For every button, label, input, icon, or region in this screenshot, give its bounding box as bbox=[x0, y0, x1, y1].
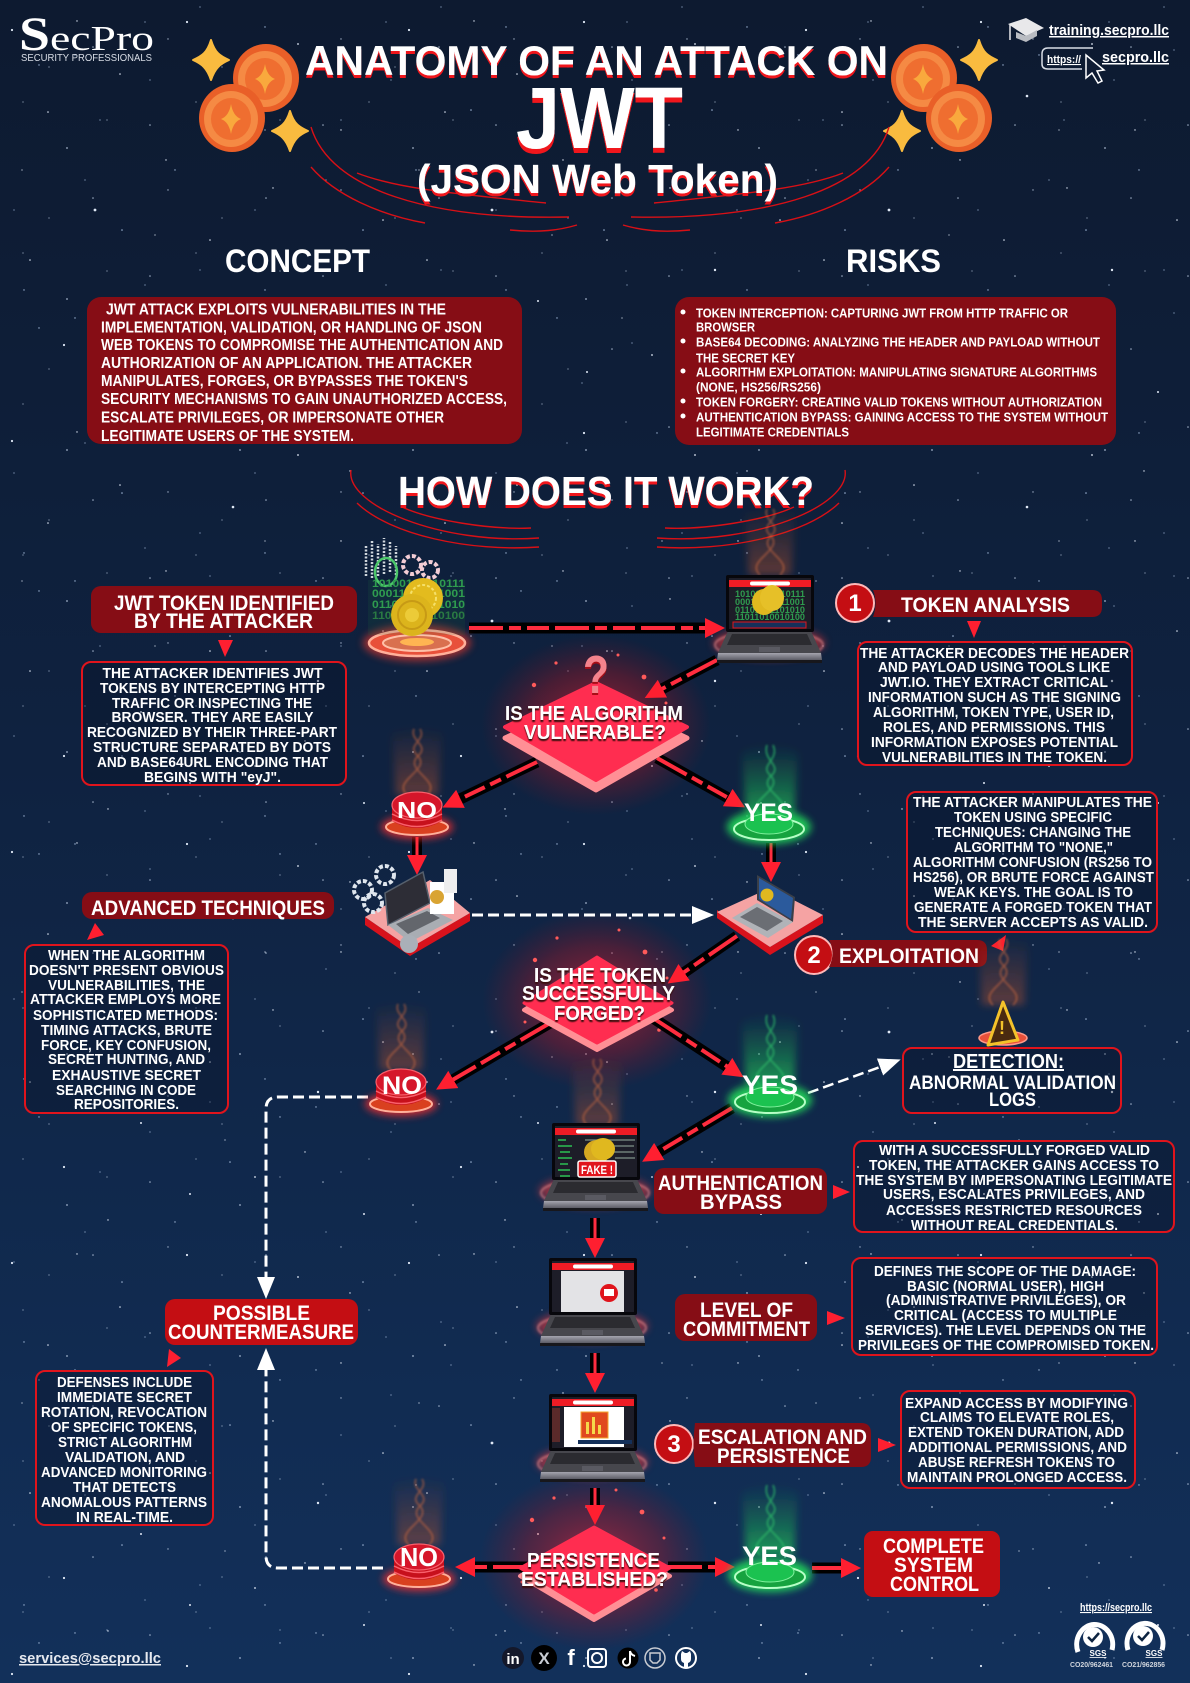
text box: countermeasure: IMMEDIATE SECRET bbox=[57, 1389, 192, 1406]
text box: escalation: CLAIMS TO ELEVATE ROLES, bbox=[920, 1409, 1114, 1426]
icon: token coins on platform: 11011010010100 bbox=[372, 610, 465, 622]
text box: escalation: MAINTAIN PROLONGED ACCESS. bbox=[907, 1469, 1127, 1486]
label: possible countermeasure bbox=[165, 1299, 358, 1345]
text box: escalation: EXPAND ACCESS BY MODIFYING bbox=[905, 1395, 1128, 1412]
text box: detection: ABNORMAL VALIDATION bbox=[909, 1073, 1116, 1094]
decision: is the token successfully forged: IS THE TOKEN bbox=[534, 965, 666, 987]
text box: level of commitment: (ADMINISTRATIVE PRIVILEGES), OR bbox=[886, 1292, 1126, 1309]
decorative coins right bbox=[884, 40, 997, 152]
footer: website and certifications bbox=[1070, 1602, 1165, 1669]
heading: concept: CONCEPT bbox=[225, 243, 370, 279]
text box: exploitation: WEAK KEYS. THE GOAL IS TO bbox=[934, 884, 1133, 901]
text box: detection: DETECTION: bbox=[953, 1051, 1064, 1073]
decision: is the algorithm vulnerable bbox=[505, 645, 687, 790]
text box: token analysis: JWT.IO. THEY EXTRACT CRITICAL bbox=[880, 674, 1108, 691]
panel: risks: TOKEN INTERCEPTION: CAPTURING JWT FROM HTTP TRAFFIC OR bbox=[696, 306, 1069, 320]
decision: is the token successfully forged bbox=[522, 957, 676, 1050]
icon: twitch bbox=[645, 1648, 665, 1668]
node: YES 2 bbox=[728, 1014, 812, 1117]
text box: advanced techniques: EXHAUSTIVE SECRET bbox=[52, 1067, 201, 1084]
icon: x bbox=[531, 1645, 557, 1671]
text box: advanced techniques: VULNERABILITIES, THE bbox=[48, 977, 205, 994]
text box: token identification: RECOGNIZED BY THEIR THREE-PART bbox=[87, 724, 337, 741]
arrows bbox=[266, 628, 880, 1568]
text box: token analysis: VULNERABILITIES IN THE TOKEN. bbox=[882, 749, 1107, 766]
title: ANATOMY OF AN ATTACK ON bbox=[305, 37, 888, 84]
heading: how does it work: HOW DOES IT WORK? bbox=[398, 468, 814, 514]
text box: token identification: THE ATTACKER IDENTIFIES JWT bbox=[102, 665, 322, 682]
icon: linkedin: in bbox=[506, 1651, 520, 1668]
badge: step 3 bbox=[655, 1425, 693, 1463]
node: YES 1: YES bbox=[744, 799, 793, 827]
text box: countermeasure: THAT DETECTS bbox=[73, 1479, 176, 1496]
badge: step 1 bbox=[836, 584, 874, 622]
text box: level of commitment: SERVICES). THE LEVEL DEPENDS ON THE bbox=[865, 1322, 1146, 1339]
heading: risks: RISKS bbox=[846, 243, 941, 279]
text box: token analysis: THE ATTACKER DECODES THE HEADER bbox=[860, 645, 1129, 662]
text box: countermeasure: OF SPECIFIC TOKENS, bbox=[51, 1419, 197, 1436]
text box: exploitation: ALGORITHM CONFUSION (RS256 TO bbox=[913, 854, 1152, 871]
link: secpro: secpro.llc bbox=[1102, 49, 1169, 66]
text box: escalation: ADDITIONAL PERMISSIONS, AND bbox=[908, 1439, 1127, 1456]
panel: concept: AUTHORIZATION OF AN APPLICATION. THE ATTACKER bbox=[101, 355, 472, 372]
icon: linkedin bbox=[502, 1647, 524, 1669]
icon: fake token laptop: FAKE ! bbox=[581, 1163, 613, 1177]
decision: persistence established: PERSISTENCE bbox=[527, 1550, 660, 1572]
icon: laptop token analysis: 10100110010111 bbox=[735, 589, 805, 599]
badge: step 2: 2 bbox=[807, 942, 821, 969]
icon: tiktok bbox=[618, 1648, 638, 1668]
text box: token identification: TOKENS BY INTERCEPTING HTTP bbox=[100, 680, 325, 697]
text box: countermeasure: IN REAL-TIME. bbox=[76, 1509, 173, 1526]
label: escalation and persistence bbox=[694, 1423, 871, 1468]
icon: instagram bbox=[588, 1649, 606, 1667]
icon: warning: ! bbox=[999, 1018, 1005, 1038]
panel: concept: ESCALATE PRIVILEGES, OR IMPERSONATE OTHER bbox=[101, 410, 444, 426]
pointer bbox=[167, 1349, 181, 1367]
icon: laptop level of commitment bbox=[536, 1258, 648, 1346]
panel: risks: TOKEN FORGERY: CREATING VALID TOKENS WITHOUT AUTHORIZATION bbox=[696, 394, 1102, 410]
panel: concept: MANIPULATES, FORGES, OR BYPASSES THE TOKEN'S bbox=[101, 373, 468, 390]
text box: authentication bypass bbox=[854, 1141, 1174, 1234]
link: training: training.secpro.llc bbox=[1049, 22, 1169, 39]
label: escalation and persistence: ESCALATION AND bbox=[698, 1426, 867, 1449]
icon: facebook: f bbox=[567, 1645, 575, 1670]
decision: is the algorithm vulnerable: IS THE ALGORITHM bbox=[505, 703, 683, 725]
text box: advanced techniques bbox=[25, 945, 228, 1113]
panel: concept: SECURITY MECHANISMS TO GAIN UNAUTHORIZED ACCESS, bbox=[101, 391, 507, 408]
panel: concept: WEB TOKENS TO COMPROMISE THE AUTHENTICATION AND bbox=[101, 337, 503, 354]
label: token analysis: TOKEN ANALYSIS bbox=[901, 594, 1070, 617]
text box: advanced techniques: FORCE, KEY CONFUSION, bbox=[41, 1037, 211, 1054]
panel: concept: JWT ATTACK EXPLOITS VULNERABILITIES IN THE bbox=[106, 302, 446, 318]
logo: SecPro: S bbox=[19, 8, 50, 61]
text box: exploitation: TECHNIQUES: CHANGING THE bbox=[935, 824, 1131, 841]
text box: countermeasure: ANOMALOUS PATTERNS bbox=[41, 1494, 207, 1511]
top right links bbox=[1008, 18, 1169, 83]
panel: risks: LEGITIMATE CREDENTIALS bbox=[696, 424, 849, 440]
node: NO 2: NO bbox=[382, 1072, 422, 1100]
label: exploitation: EXPLOITATION bbox=[839, 945, 979, 968]
icon: warning bbox=[978, 936, 1028, 1045]
decorative coins left bbox=[193, 40, 308, 152]
badge: SGS 1 bbox=[1070, 1625, 1113, 1669]
badge: SGS 1: CO20/962461 bbox=[1070, 1660, 1113, 1669]
footer: website and certifications: https://secpro.llc bbox=[1080, 1602, 1152, 1614]
title: JWT bbox=[516, 70, 683, 167]
label: possible countermeasure: POSSIBLE bbox=[213, 1302, 310, 1325]
logo: SecPro: SECURITY PROFESSIONALS bbox=[21, 53, 152, 64]
text box: exploitation: ALGORITHM TO "NONE," bbox=[954, 839, 1113, 856]
text box: token analysis bbox=[858, 642, 1132, 766]
icon: laptop token analysis: 11011010010100 bbox=[735, 612, 805, 622]
text box: level of commitment: PRIVILEGES OF THE COMPROMISED TOKEN. bbox=[858, 1337, 1154, 1354]
text box: authentication bypass: ACCESSES RESTRICTED RESOURCES bbox=[886, 1202, 1142, 1219]
label: level of commitment bbox=[675, 1294, 817, 1341]
node: YES 3: YES bbox=[742, 1541, 797, 1571]
label: possible countermeasure: COUNTERMEASURE bbox=[168, 1321, 354, 1344]
decision: is the algorithm vulnerable: ? bbox=[583, 645, 609, 705]
text box: authentication bypass: USERS, ESCALATES PRIVILEGES, AND bbox=[883, 1186, 1145, 1203]
node: YES 3 bbox=[728, 1484, 812, 1592]
panel: concept: IMPLEMENTATION, VALIDATION, OR HANDLING OF JSON bbox=[101, 320, 482, 336]
icon: laptop token analysis bbox=[713, 506, 825, 663]
icon: laptop token analysis: 00011100011001 bbox=[735, 597, 805, 607]
pointer bbox=[878, 1438, 896, 1452]
label: complete system control: COMPLETE bbox=[883, 1535, 984, 1558]
text box: authentication bypass: WITH A SUCCESSFULLY FORGED VALID bbox=[879, 1142, 1150, 1159]
text box: escalation: ABUSE REFRESH TOKENS TO bbox=[918, 1454, 1115, 1471]
text box: level of commitment: DEFINES THE SCOPE OF THE DAMAGE: bbox=[874, 1263, 1136, 1280]
icon: token coins on platform bbox=[363, 538, 471, 661]
label: token analysis bbox=[873, 590, 1102, 617]
icon: token coins on platform: 01101001101010 bbox=[372, 599, 465, 611]
text box: advanced techniques: DOESN'T PRESENT OBVIOUS bbox=[29, 962, 224, 979]
text box: detection: LOGS bbox=[989, 1090, 1036, 1111]
decision: is the token successfully forged: SUCCESSFULLY bbox=[522, 983, 676, 1005]
icon: x: X bbox=[538, 1649, 550, 1668]
text box: token analysis: INFORMATION EXPOSES POTENTIAL bbox=[871, 734, 1118, 751]
label: complete system control: CONTROL bbox=[890, 1573, 979, 1596]
decision: is the token successfully forged: FORGED? bbox=[554, 1003, 645, 1025]
decision: is the algorithm vulnerable: VULNERABLE? bbox=[524, 722, 666, 744]
icon: fake token laptop bbox=[539, 1056, 651, 1211]
panel: risks bbox=[675, 297, 1116, 445]
badge: step 2 bbox=[795, 936, 833, 974]
text box: escalation bbox=[901, 1391, 1135, 1488]
title bbox=[305, 37, 888, 202]
text box: advanced techniques: WHEN THE ALGORITHM bbox=[48, 947, 205, 964]
node: NO 3: NO bbox=[400, 1542, 438, 1572]
text box: advanced techniques: SECRET HUNTING, AND bbox=[48, 1051, 205, 1068]
decision: persistence established bbox=[520, 1527, 670, 1620]
logo: SecPro bbox=[19, 8, 154, 64]
label: escalation and persistence: PERSISTENCE bbox=[717, 1445, 850, 1468]
label: advanced techniques: ADVANCED TECHNIQUES bbox=[91, 897, 325, 920]
label: complete system control: SYSTEM bbox=[894, 1554, 973, 1577]
text box: advanced techniques: REPOSITORIES. bbox=[74, 1096, 179, 1113]
node: NO 2 bbox=[365, 1002, 437, 1116]
pointer bbox=[87, 923, 104, 940]
pointer bbox=[967, 621, 981, 638]
badge: step 1: 1 bbox=[848, 590, 862, 617]
panel: risks: BASE64 DECODING: ANALYZING THE HEADER AND PAYLOAD WITHOUT bbox=[696, 334, 1100, 350]
icon: exploitation laptop bbox=[717, 875, 823, 955]
text box: exploitation: THE SERVER ACCEPTS AS VALID. bbox=[918, 914, 1148, 931]
node: YES 2: YES bbox=[742, 1070, 798, 1100]
label: authentication bypass: AUTHENTICATION bbox=[658, 1172, 823, 1195]
text box: token identification: TRAFFIC OR INSPECTING THE bbox=[112, 695, 312, 712]
logo: SecPro: ecPro bbox=[50, 19, 154, 58]
text box: token identification: STRUCTURE SEPARATED BY DOTS bbox=[93, 739, 331, 756]
panel: concept bbox=[87, 297, 522, 445]
icon: token coins on platform: 00011100011001 bbox=[372, 588, 465, 600]
badge: SGS 2: SGS bbox=[1146, 1649, 1163, 1658]
text box: countermeasure: ADVANCED MONITORING bbox=[41, 1464, 207, 1481]
icon: laptop token analysis: 01101001101010 bbox=[735, 605, 805, 615]
panel: risks: (NONE, HS256/RS256) bbox=[696, 380, 821, 394]
text box: token identification bbox=[82, 662, 346, 786]
text box: detection bbox=[903, 1048, 1121, 1113]
text box: token analysis: INFORMATION SUCH AS THE SIGNING bbox=[868, 689, 1121, 706]
text box: exploitation: GENERATE A FORGED TOKEN THAT bbox=[914, 899, 1152, 916]
icon: laptop escalation bbox=[536, 1394, 648, 1482]
text box: token analysis: ALGORITHM, TOKEN TYPE, USER ID, bbox=[873, 704, 1114, 721]
text box: level of commitment bbox=[852, 1258, 1157, 1355]
text box: advanced techniques: TIMING ATTACKS, BRUTE bbox=[41, 1022, 212, 1039]
panel: risks: AUTHENTICATION BYPASS: GAINING ACCESS TO THE SYSTEM WITHOUT bbox=[696, 410, 1108, 424]
node: NO 3 bbox=[383, 1476, 455, 1591]
decision: persistence established: ESTABLISHED? bbox=[521, 1569, 668, 1591]
pointer bbox=[827, 1311, 845, 1325]
panel: concept: LEGITIMATE USERS OF THE SYSTEM. bbox=[101, 428, 354, 445]
pointer bbox=[833, 1185, 850, 1199]
label: level of commitment: COMMITMENT bbox=[683, 1318, 810, 1341]
icon: https box: https:// bbox=[1047, 54, 1081, 66]
text box: token identification: BROWSER. THEY ARE EASILY bbox=[112, 709, 314, 726]
label: level of commitment: LEVEL OF bbox=[700, 1299, 793, 1322]
pointer bbox=[218, 640, 233, 657]
label: JWT token identified: BY THE ATTACKER bbox=[134, 610, 313, 633]
label: JWT token identified bbox=[91, 586, 357, 633]
icon: graduation cap bbox=[1008, 18, 1044, 42]
text box: exploitation: THE ATTACKER MANIPULATES THE bbox=[913, 794, 1152, 811]
text box: advanced techniques: SEARCHING IN CODE bbox=[56, 1082, 196, 1099]
text box: countermeasure: DEFENSES INCLUDE bbox=[57, 1374, 192, 1391]
text box: advanced techniques: ATTACKER EMPLOYS MORE bbox=[30, 991, 221, 1008]
node: YES 1 bbox=[727, 744, 811, 844]
decision glows bbox=[479, 635, 712, 1650]
text box: level of commitment: BASIC (NORMAL USER), HIGH bbox=[907, 1278, 1104, 1295]
text box: token identification: AND BASE64URL ENCODING THAT bbox=[97, 754, 328, 771]
text box: exploitation: HS256), OR BRUTE FORCE AGAINST bbox=[913, 869, 1154, 886]
badge: SGS 1: SGS bbox=[1090, 1649, 1107, 1658]
label: complete system control bbox=[864, 1531, 1000, 1597]
text box: advanced techniques: SOPHISTICATED METHODS: bbox=[33, 1007, 218, 1024]
footer: email: services@secpro.llc bbox=[19, 1650, 161, 1667]
label: authentication bypass bbox=[654, 1168, 827, 1214]
text box: token analysis: ROLES, AND PERMISSIONS. THIS bbox=[883, 719, 1105, 736]
text box: countermeasure: ROTATION, REVOCATION bbox=[41, 1404, 207, 1421]
text box: escalation: EXTEND TOKEN DURATION, ADD bbox=[908, 1424, 1124, 1441]
text box: token analysis: AND PAYLOAD USING TOOLS LIKE bbox=[878, 659, 1110, 676]
text box: authentication bypass: TOKEN, THE ATTACKER GAINS ACCESS TO bbox=[869, 1157, 1159, 1174]
text box: countermeasure: VALIDATION, AND bbox=[65, 1449, 185, 1466]
text box: token identification: BEGINS WITH "eyJ". bbox=[144, 769, 281, 786]
pointer bbox=[991, 935, 1006, 951]
badge: step 3: 3 bbox=[667, 1431, 681, 1458]
icon: github bbox=[676, 1648, 696, 1668]
node: NO 1 bbox=[381, 726, 453, 839]
icon: advanced techniques laptop bbox=[354, 866, 470, 956]
panel: risks: ALGORITHM EXPLOITATION: MANIPULATING SIGNATURE ALGORITHMS bbox=[696, 364, 1097, 380]
panel: risks: BROWSER bbox=[696, 320, 756, 334]
badge: SGS 2: CO21/962856 bbox=[1122, 1660, 1165, 1669]
label: JWT token identified: JWT TOKEN IDENTIFIED bbox=[114, 592, 334, 615]
text box: authentication bypass: THE SYSTEM BY IMPERSONATING LEGITIMATE bbox=[856, 1172, 1172, 1189]
panel: risks: THE SECRET KEY bbox=[696, 350, 795, 366]
title: (JSON Web Token) bbox=[417, 156, 778, 202]
text box: authentication bypass: WITHOUT REAL CREDENTIALS. bbox=[911, 1217, 1118, 1234]
social icons bbox=[502, 1645, 696, 1671]
icon: token coins on platform: 10100110010111 bbox=[372, 578, 465, 590]
text box: exploitation: TOKEN USING SPECIFIC bbox=[954, 809, 1112, 826]
icon: https box bbox=[1042, 48, 1093, 69]
text box: countermeasure bbox=[36, 1371, 213, 1526]
badge: SGS 2 bbox=[1122, 1623, 1165, 1669]
node: NO 1: NO bbox=[397, 797, 437, 823]
text box: countermeasure: STRICT ALGORITHM bbox=[58, 1434, 192, 1451]
label: authentication bypass: BYPASS bbox=[700, 1191, 782, 1214]
text box: level of commitment: CRITICAL (ACCESS TO MULTIPLE bbox=[894, 1307, 1117, 1324]
text box: exploitation bbox=[907, 792, 1157, 932]
icon: cursor bbox=[1086, 55, 1104, 83]
